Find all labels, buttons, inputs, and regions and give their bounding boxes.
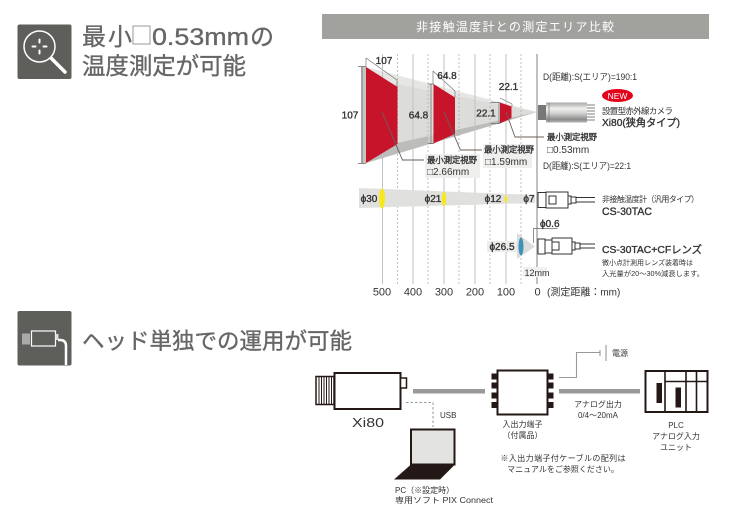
dimension phi 0.6: ϕ0.6 [540, 219, 560, 230]
Xi80 product label: Xi80(狭角タイプ) [602, 116, 680, 129]
distance axis labels: 500 [373, 286, 391, 298]
spot size band CS-30TAC [359, 188, 535, 208]
callout: 2.66mm [425, 154, 480, 178]
NEW badge: NEW [608, 91, 627, 101]
cone field of view [358, 58, 537, 164]
PLC label [652, 421, 700, 452]
spot size band CF lens [487, 233, 535, 259]
icon: I/O terminal [492, 370, 554, 414]
Xi80 label: Xi80 [352, 416, 384, 430]
callout: 1.59mm: □1.59mm [485, 157, 527, 168]
icon: CS-30TAC sensor [538, 192, 595, 208]
analog output cable [559, 389, 640, 394]
spot size band CS-30TAC: ϕ7 [523, 194, 535, 205]
ratio label 22:1: D(距離):S(エリア)=22:1 [543, 160, 631, 171]
dimension labels: 64.8 [409, 110, 429, 122]
power line: 電源 [612, 349, 628, 358]
dimension labels: 22.1 [476, 108, 496, 120]
analog output label [574, 399, 622, 420]
spot size band CS-30TAC: ϕ21 [425, 194, 442, 205]
USB dashed link [406, 402, 456, 427]
section 2 title: ヘッド単独での運用が可能 [82, 329, 352, 354]
terminal label: 入出力端子 [502, 419, 542, 429]
PLC label: ユニット [660, 443, 692, 452]
CF lens label: 入光量が20～30%減衰します。 [602, 269, 704, 278]
icon: laptop [394, 430, 455, 480]
distance axis labels: 300 [435, 286, 453, 298]
callout: 2.66mm: 最小測定視野 [427, 155, 477, 165]
callout: 0.53mm: □0.53mm [547, 145, 589, 156]
section 2 heading [18, 311, 352, 366]
dimension labels [342, 56, 519, 122]
icon: Xi80 camera [538, 102, 595, 122]
distance axis labels: 200 [466, 286, 484, 298]
callout: 1.59mm: 最小測定視野 [484, 144, 534, 154]
distance axis labels: (測定距離：mm) [547, 286, 620, 298]
cable note: ※入出力端子付ケーブルの配列は [500, 453, 626, 463]
leader lines [382, 112, 544, 160]
spot size band CS-30TAC: ϕ30 [361, 194, 378, 205]
CS-30TAC label: 非接触温度計（汎用タイプ） [602, 194, 699, 204]
cable note [500, 453, 626, 474]
title line 1: 0.53mm [152, 24, 249, 51]
terminal label [502, 419, 542, 440]
CS-30TAC label: CS-30TAC [602, 206, 652, 218]
analog output label: アナログ出力 [574, 399, 622, 409]
section 1 heading [18, 24, 274, 79]
PLC label: PLC [668, 421, 684, 430]
distance axis labels: 400 [404, 286, 422, 298]
power line [559, 345, 628, 378]
dimension labels: 107 [376, 56, 393, 67]
title line 1: 最小 [82, 24, 132, 51]
USB dashed link: USB [440, 411, 456, 420]
title line 1: の [250, 24, 274, 51]
callout: 2.66mm: □2.66mm [427, 167, 469, 178]
dimension labels: 22.1 [499, 82, 519, 93]
Xi80 product label [602, 106, 680, 129]
CS-30TAC label [602, 194, 699, 218]
title line 2: 温度測定が可能 [82, 53, 246, 79]
analog output label: 0/4～20mA [578, 411, 619, 420]
PC label: 専用ソフト PIX Connect [395, 495, 494, 505]
distance axis labels [373, 286, 620, 298]
panel header bar [322, 14, 709, 39]
PC label: PC（※設定時） [395, 486, 454, 495]
dimension 12mm: 12mm [524, 268, 550, 278]
CF lens label: 微小点計測用レンズ装着時は [602, 258, 693, 267]
dimension phi 0.6 [534, 219, 560, 243]
panel: system diagram [316, 345, 708, 505]
callout: 0.53mm [547, 132, 597, 156]
distance axis labels: 100 [497, 286, 515, 298]
Xi80 product label: 設置型赤外線カメラ [602, 106, 673, 116]
distance axis labels: 0 [534, 286, 541, 298]
ratio label 190:1: D(距離):S(エリア)=190:1 [543, 71, 637, 82]
dimension labels: 64.8 [437, 71, 457, 82]
cable to terminal [413, 389, 485, 394]
cable note: マニュアルをご参照ください。 [507, 464, 619, 474]
PC label [395, 486, 494, 505]
title line 1 [82, 24, 274, 51]
spot size band CF lens: ϕ26.5 [489, 242, 515, 253]
icon: PLC [646, 371, 708, 412]
PLC label: アナログ入力 [652, 431, 700, 441]
terminal label: （付属品） [502, 430, 542, 440]
icon: sensor head [18, 311, 72, 366]
CF lens label: CS-30TAC+CFレンズ [602, 243, 702, 256]
distance grid lines [382, 54, 537, 284]
callout: 0.53mm: 最小測定視野 [547, 132, 597, 142]
icon: CS-30TAC with CF lens [538, 238, 595, 254]
callout: 1.59mm [483, 144, 534, 168]
icon: magnifier [18, 24, 72, 79]
panel header bar: 非接触温度計との測定エリア比較 [416, 19, 614, 34]
spot size band CS-30TAC: ϕ12 [485, 194, 502, 205]
dimension labels: 107 [342, 110, 359, 122]
CF lens label [602, 243, 704, 278]
icon: Xi80 head [316, 373, 406, 409]
NEW badge [602, 89, 633, 102]
panel: measurement area comparison [322, 14, 709, 298]
red measurement areas [366, 67, 512, 163]
